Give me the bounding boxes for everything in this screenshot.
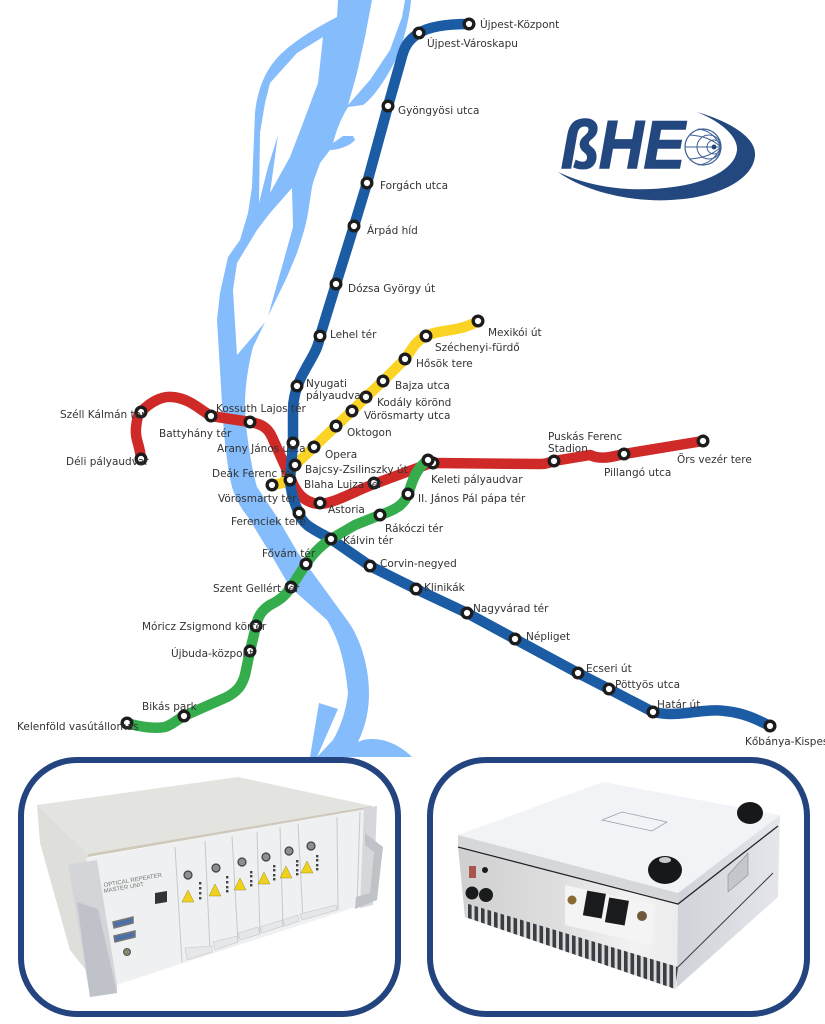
rack: master unit text: OPTICAL REPEATER [103, 873, 163, 889]
station labels: Rákóczi tér [385, 523, 444, 535]
station labels: Fővám tér [262, 548, 316, 560]
enclosure: knobs [648, 802, 763, 884]
enclosure: front body [458, 847, 678, 989]
station labels: Oktogon [347, 427, 392, 439]
rack: serial ports [113, 917, 135, 942]
station labels: Puskás Ferenc [548, 431, 623, 443]
station labels: Déli pályaudvar [66, 456, 149, 468]
station markers [122, 19, 775, 731]
rack: power connector [124, 948, 130, 956]
rack: side face [37, 805, 92, 978]
enclosure: connectors [466, 886, 647, 926]
enclosure: lid band [458, 835, 678, 903]
station labels: Kodály körönd [377, 397, 451, 409]
rack: optical connectors [184, 842, 315, 879]
station labels: Újpest-Központ [480, 18, 559, 31]
logo: BHE [558, 107, 755, 200]
enclosure: top label plate [602, 812, 667, 831]
rack: ethernet port [155, 891, 167, 904]
station labels: Vörösmarty utca [364, 410, 450, 422]
rack: module handles [185, 905, 337, 960]
station labels: Kossuth Lajos tér [216, 403, 307, 415]
rack: modules [175, 812, 360, 962]
station labels: Deák Ferenc tér [212, 468, 296, 480]
station labels: Dózsa György út [348, 283, 435, 295]
logo: BHE: ßHE [561, 107, 687, 183]
station labels: Kálvin tér [343, 535, 394, 547]
rack: left handle [77, 902, 117, 997]
station labels: Vörösmarty tér [218, 493, 297, 505]
station labels: Gyöngyösi utca [398, 105, 479, 117]
rack: front face [86, 807, 376, 985]
station labels: Bajcsy-Zsilinszky út [305, 464, 408, 476]
station labels: Széchenyi-fürdő [435, 342, 520, 354]
station labels: Móricz Zsigmond körtér [142, 621, 267, 633]
station labels: Kelenföld vasútállomás [17, 721, 139, 733]
station labels: Klinikák [424, 582, 466, 594]
station labels: Forgách utca [380, 180, 448, 192]
station labels: Széll Kálmán tér [60, 409, 146, 421]
station labels: Újbuda-központ [171, 647, 253, 660]
station labels: Árpád híd [367, 224, 418, 237]
metro line M2 (yellow) [272, 321, 478, 485]
river: Danube [217, 0, 412, 757]
station labels: Újpest-Városkapu [427, 37, 518, 50]
station labels: Határ út [657, 699, 700, 711]
station labels: Ecseri út [586, 663, 632, 675]
station labels: Battyhány tér [159, 428, 232, 440]
station labels: Arany János utca [217, 443, 306, 455]
enclosure: connector plate [565, 885, 655, 945]
station labels: Opera [325, 449, 357, 461]
station labels: Corvin-negyed [380, 558, 457, 570]
rack: right handle [355, 833, 383, 909]
station labels: Lehel tér [330, 329, 377, 341]
rack: top face [37, 777, 372, 854]
rack: right ear [360, 806, 377, 908]
station labels: Hősök tere [416, 358, 473, 370]
metro line M4 (green) [127, 460, 428, 728]
station labels: Bajza utca [395, 380, 450, 392]
station labels: Népliget [526, 631, 570, 643]
station labels: Bikás park [142, 701, 198, 713]
enclosure: side label [728, 853, 748, 892]
station labels: Szent Gellért tér [213, 583, 300, 595]
station labels: Stadion [548, 443, 588, 455]
station labels: Keleti pályaudvar [431, 474, 523, 486]
station labels: Pöttyös utca [615, 679, 680, 691]
station labels: Nagyvárad tér [473, 603, 549, 615]
metro line M3 (blue) [290, 24, 770, 726]
station labels: Pillangó utca [604, 467, 671, 479]
station labels: Ferenciek tere [231, 516, 306, 528]
station labels: pályaudvar [306, 390, 366, 402]
station labels: Astoria [328, 504, 365, 516]
rack: left ear [68, 860, 117, 997]
rack: laser warning triangles [182, 861, 313, 902]
metro line M1/red [136, 397, 703, 504]
station labels [17, 18, 825, 748]
station labels: Örs vezér tere [677, 453, 752, 466]
enclosure: heat sink [465, 903, 678, 989]
station labels: Blaha Lujza tér [304, 479, 383, 491]
panel: optical repeater master unit [21, 760, 398, 1014]
station labels: Mexikói út [488, 327, 542, 339]
station labels: II. János Pál pápa tér [418, 493, 526, 505]
enclosure: right side [675, 815, 780, 989]
rack: status LEDs [199, 855, 318, 899]
rack: master unit subtitle: MASTER UNIT [103, 882, 145, 895]
enclosure: top face [458, 782, 780, 893]
panel: outdoor unit [430, 760, 807, 1014]
station labels: Nyugati [306, 378, 347, 390]
